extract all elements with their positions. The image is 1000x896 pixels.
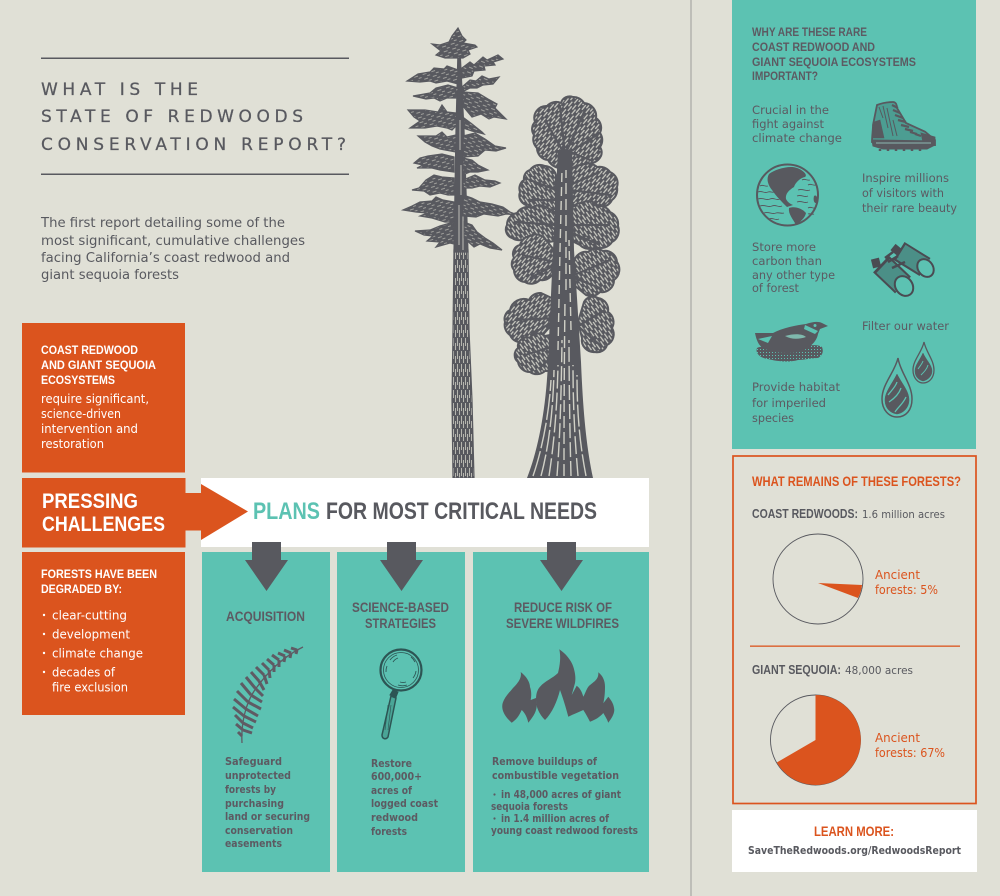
coast redwoods label: COAST REDWOODS:	[752, 506, 858, 521]
degradation list: decades of	[52, 666, 116, 680]
why heading: WHY ARE THESE RARE	[752, 25, 867, 39]
title block: CONSERVATION REPORT?	[41, 135, 346, 155]
intro paragraph	[40, 215, 305, 283]
giant sequoia value	[875, 731, 945, 760]
acquisition text: land or securing	[225, 811, 310, 823]
habitat text: Provide habitat	[752, 380, 840, 394]
acquisition text: Safeguard	[225, 756, 282, 768]
panel: learn more	[732, 810, 977, 872]
acquisition text: forests by	[225, 784, 276, 796]
banner: plans for most critical needs: FOR MOST CRITICAL NEEDS	[326, 498, 597, 525]
ecosystems text: restoration	[41, 437, 104, 451]
science text: forests	[371, 826, 407, 838]
wildfire text: combustible vegetation	[492, 770, 619, 782]
habitat text: for imperiled	[752, 396, 826, 410]
icon: water drops	[882, 342, 934, 417]
icon: magnifying glass	[380, 650, 422, 739]
science text: 600,000+	[371, 771, 422, 783]
wildfire text: Remove buildups of	[492, 756, 597, 768]
coast redwoods value: forests: 5%	[875, 583, 938, 597]
ecosystems heading: ECOSYSTEMS	[41, 373, 115, 387]
wildfire heading: SEVERE WILDFIRES	[506, 615, 619, 631]
icon: nesting bird	[755, 322, 828, 362]
ecosystems text: require significant,	[41, 392, 149, 406]
carbon text: carbon than	[752, 254, 822, 268]
panel: learn more: SaveTheRedwoods.org/RedwoodsReport	[748, 845, 961, 857]
title block: STATE OF REDWOODS	[41, 107, 303, 127]
carbon text: of forest	[752, 281, 799, 295]
acquisition text: unprotected	[225, 770, 291, 782]
science heading: SCIENCE-BASED	[352, 599, 449, 615]
title block: WHAT IS THE	[41, 80, 198, 100]
wildfire text: sequoia forests	[491, 801, 568, 813]
degraded heading	[41, 567, 157, 596]
acquisition text: purchasing	[225, 798, 284, 810]
science heading: STRATEGIES	[365, 615, 436, 631]
climate text	[752, 103, 842, 145]
why heading	[752, 25, 916, 83]
degradation list: fire exclusion	[52, 680, 128, 694]
why heading: IMPORTANT?	[752, 69, 818, 83]
illustration: coast redwood tree	[403, 28, 518, 478]
icon: binoculars	[872, 247, 937, 299]
wildfire text: young coast redwood forests	[491, 825, 638, 837]
science heading	[352, 599, 449, 631]
panel: what remains	[733, 456, 976, 804]
ecosystems text	[41, 392, 149, 451]
intro paragraph: giant sequoia forests	[41, 267, 179, 283]
arrow	[380, 542, 423, 591]
carbon text: Store more	[752, 240, 816, 254]
wildfire heading	[506, 599, 619, 631]
degradation list	[43, 608, 143, 694]
ecosystems text: intervention and	[41, 422, 138, 436]
giant sequoia label	[752, 662, 913, 677]
climate text: climate change	[752, 131, 842, 145]
panel: why important	[732, 0, 976, 449]
pie chart: coast redwoods 5%	[773, 534, 863, 624]
intro paragraph: The first report detailing some of the	[40, 215, 285, 231]
habitat text	[752, 380, 840, 425]
carbon text	[752, 240, 835, 295]
science text: Restore	[371, 758, 412, 770]
giant sequoia label: GIANT SEQUOIA:	[752, 662, 841, 677]
panel: degraded by	[22, 552, 185, 715]
acquisition text: conservation	[225, 825, 293, 837]
science text: logged coast	[371, 798, 438, 810]
icon: hiking boot	[872, 102, 935, 151]
visitors text: of visitors with	[862, 186, 944, 200]
degraded heading: FORESTS HAVE BEEN	[41, 567, 157, 581]
pie chart: giant sequoia 67%	[770, 695, 861, 785]
ecosystems text: science-driven	[41, 407, 121, 421]
ecosystems heading: AND GIANT SEQUOIA	[41, 358, 156, 372]
arrow	[540, 542, 583, 591]
visitors text: Inspire millions	[862, 171, 949, 185]
science text	[371, 758, 438, 838]
wildfire text: in 48,000 acres of giant	[501, 789, 621, 801]
carbon text: any other type	[752, 268, 835, 282]
giant sequoia label: 48,000 acres	[845, 665, 913, 677]
panel: science-based strategies	[337, 542, 465, 872]
panel: ecosystems	[22, 323, 185, 472]
degradation list: clear-cutting	[52, 608, 127, 622]
degradation list: climate change	[52, 646, 143, 660]
pressing challenges arrow: PRESSING	[42, 490, 138, 513]
visitors text	[862, 171, 957, 215]
acquisition text	[225, 756, 310, 850]
coast redwoods label	[752, 506, 945, 521]
giant sequoia value: Ancient	[875, 731, 920, 745]
degradation list: development	[52, 628, 130, 642]
arrow	[245, 542, 288, 591]
coast redwoods value: Ancient	[875, 568, 920, 582]
water text: Filter our water	[862, 319, 949, 333]
icon: flames	[502, 649, 614, 723]
ecosystems heading: COAST REDWOOD	[41, 343, 138, 357]
banner: plans for most critical needs: PLANS	[253, 498, 320, 525]
giant sequoia value: forests: 67%	[875, 746, 945, 760]
pressing challenges arrow: CHALLENGES	[42, 513, 165, 536]
intro paragraph: most significant, cumulative challenges	[41, 233, 305, 249]
acquisition heading: ACQUISITION	[226, 608, 305, 624]
banner: plans for most critical needs	[201, 478, 649, 547]
pressing challenges arrow	[22, 478, 248, 548]
illustration: giant sequoia tree	[505, 96, 619, 478]
icon: fern	[233, 647, 303, 743]
column divider	[690, 0, 692, 896]
wildfire heading: REDUCE RISK OF	[514, 599, 612, 615]
coast redwoods value	[875, 568, 938, 597]
intro paragraph: facing California’s coast redwood and	[41, 250, 290, 266]
wildfire text: in 1.4 million acres of	[501, 813, 609, 825]
climate text: Crucial in the	[752, 103, 829, 117]
habitat text: species	[752, 411, 794, 425]
degraded heading: DEGRADED BY:	[41, 582, 122, 596]
panel: reduce wildfire risk	[473, 542, 649, 872]
coast redwoods label: 1.6 million acres	[862, 509, 945, 521]
visitors text: their rare beauty	[862, 201, 957, 215]
panel: acquisition	[202, 542, 330, 872]
icon: globe	[757, 164, 818, 226]
science text: acres of	[371, 785, 412, 797]
why heading: GIANT SEQUOIA ECOSYSTEMS	[752, 55, 916, 69]
climate text: fight against	[752, 117, 824, 131]
why heading: COAST REDWOOD AND	[752, 40, 875, 54]
ecosystems heading	[41, 343, 156, 387]
title block	[41, 58, 349, 175]
science text: redwood	[371, 812, 418, 824]
acquisition text: easements	[225, 838, 282, 850]
wildfire text	[491, 756, 638, 837]
panel: learn more: LEARN MORE:	[814, 823, 894, 839]
